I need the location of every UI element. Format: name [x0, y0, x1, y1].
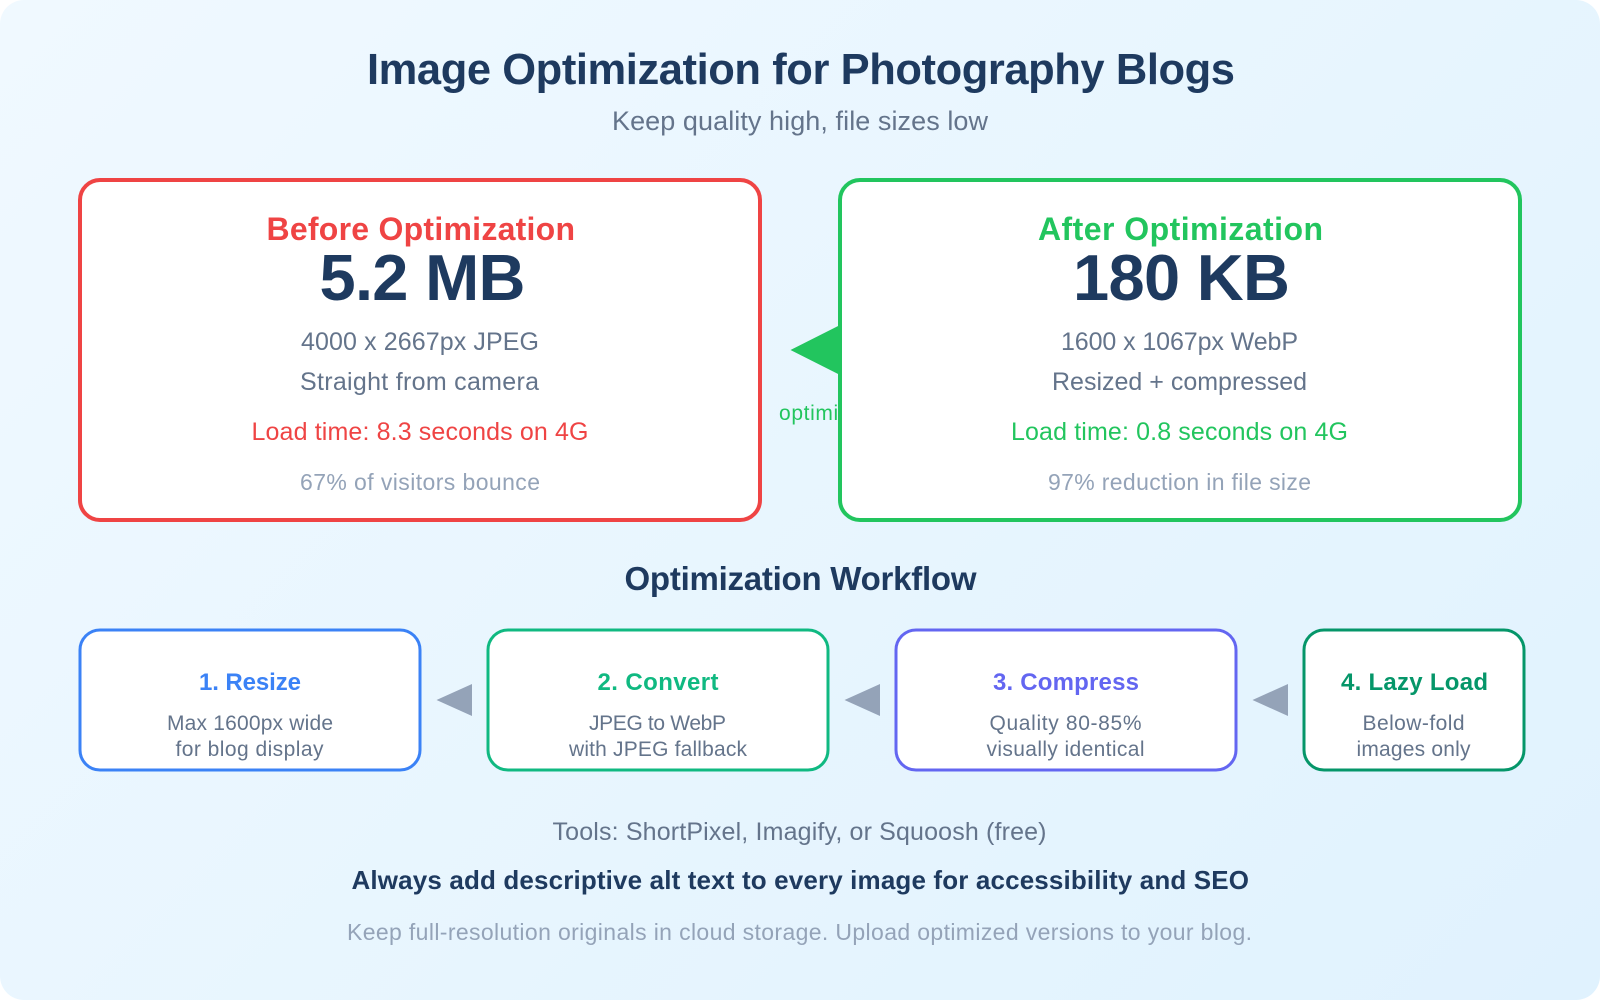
step 4 title: 4. Lazy Load [1341, 669, 1488, 696]
after file size: 180 KB [1073, 241, 1290, 314]
after dimensions: 1600 x 1067px WebP [1061, 328, 1298, 356]
arrow: step 3 to 4 [1252, 684, 1288, 716]
step 3 title: 3. Compress [993, 669, 1139, 696]
storage note: Keep full-resolution originals in cloud storage. Upload optimized versions to your blog. [347, 919, 1252, 945]
before file size: 5.2 MB [320, 241, 526, 314]
arrow: before to after [790, 320, 850, 380]
after method: Resized + compressed [1052, 368, 1307, 396]
after load time: Load time: 0.8 seconds on 4G [1011, 418, 1348, 446]
arrow label: optimized [779, 402, 874, 425]
panel: before optimization [80, 180, 760, 520]
step 3 description: Quality 80-85% [990, 712, 1142, 735]
step 3: compress [896, 630, 1236, 770]
before bounce: 67% of visitors bounce [300, 469, 540, 495]
step 2 description [568, 712, 748, 761]
step 2: convert [488, 630, 828, 770]
before source: Straight from camera [300, 368, 539, 396]
after reduction: 97% reduction in file size [1048, 469, 1311, 495]
step 1 title: 1. Resize [199, 669, 301, 696]
step 4 description: images only [1356, 738, 1471, 761]
step 4 description: Below-fold [1362, 712, 1464, 735]
step 2 title: 2. Convert [598, 669, 718, 696]
step 2 description: with JPEG fallback [568, 738, 748, 761]
step 2 description: JPEG to WebP [589, 712, 726, 735]
step 3 description: visually identical [986, 738, 1144, 761]
step 1: resize [80, 630, 420, 770]
title: Image Optimization for Photography Blogs [367, 46, 1235, 94]
subtitle: Keep quality high, file sizes low [612, 106, 988, 136]
arrow: step 1 to 2 [436, 684, 472, 716]
step 1 description: Max 1600px wide [167, 712, 333, 735]
before heading: Before Optimization [266, 211, 575, 247]
step 4 description [1356, 712, 1471, 761]
alt text tip: Always add descriptive alt text to every image for accessibility and SEO [352, 865, 1249, 895]
step 4: lazy load [1304, 630, 1524, 770]
step 1 description: for blog display [176, 738, 324, 761]
panel: after optimization [840, 180, 1520, 520]
tools note: Tools: ShortPixel, Imagify, or Squoosh (free) [552, 818, 1046, 846]
after heading: After Optimization [1038, 211, 1323, 247]
workflow heading: Optimization Workflow [624, 560, 977, 597]
arrow: step 2 to 3 [844, 684, 880, 716]
before load time: Load time: 8.3 seconds on 4G [252, 418, 588, 446]
step 1 description [167, 712, 333, 761]
step 3 description [986, 712, 1144, 761]
before dimensions: 4000 x 2667px JPEG [301, 328, 539, 356]
